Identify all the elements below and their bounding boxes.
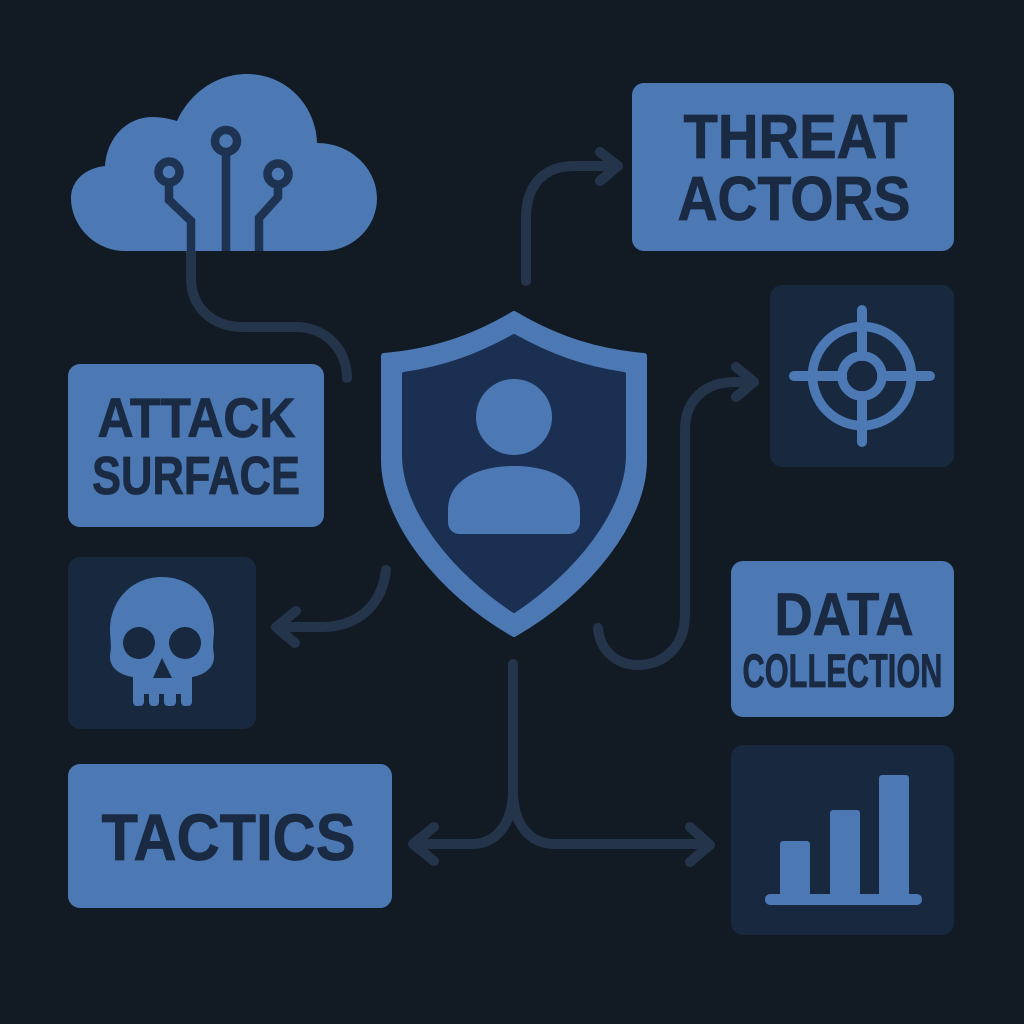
icon: cloud with circuit bbox=[71, 74, 377, 251]
icon: shield with person bbox=[384, 314, 644, 634]
panel: target icon bbox=[770, 285, 954, 467]
panel: attack surface bbox=[68, 364, 324, 527]
arrow: cloud to attack surface bbox=[191, 248, 347, 378]
panel: data collection: DATA bbox=[774, 581, 914, 648]
panel: attack surface: SURFACE bbox=[92, 446, 300, 506]
panel: attack surface: ATTACK bbox=[98, 386, 296, 449]
arrow: shield to tactics and chart bbox=[413, 664, 710, 862]
arrow: shield to skull bbox=[276, 570, 386, 643]
arrow: shield to target bbox=[598, 367, 754, 665]
arrow: shield to threat actors bbox=[526, 152, 618, 281]
panel: threat actors bbox=[632, 83, 954, 251]
panel: bar chart icon bbox=[731, 745, 954, 935]
panel: tactics bbox=[68, 764, 392, 908]
panel: tactics: TACTICS bbox=[102, 800, 356, 874]
panel: threat actors: THREAT bbox=[684, 103, 908, 172]
panel: skull icon bbox=[68, 557, 256, 729]
panel: threat actors: ACTORS bbox=[678, 165, 910, 234]
panel: data collection bbox=[731, 561, 954, 717]
